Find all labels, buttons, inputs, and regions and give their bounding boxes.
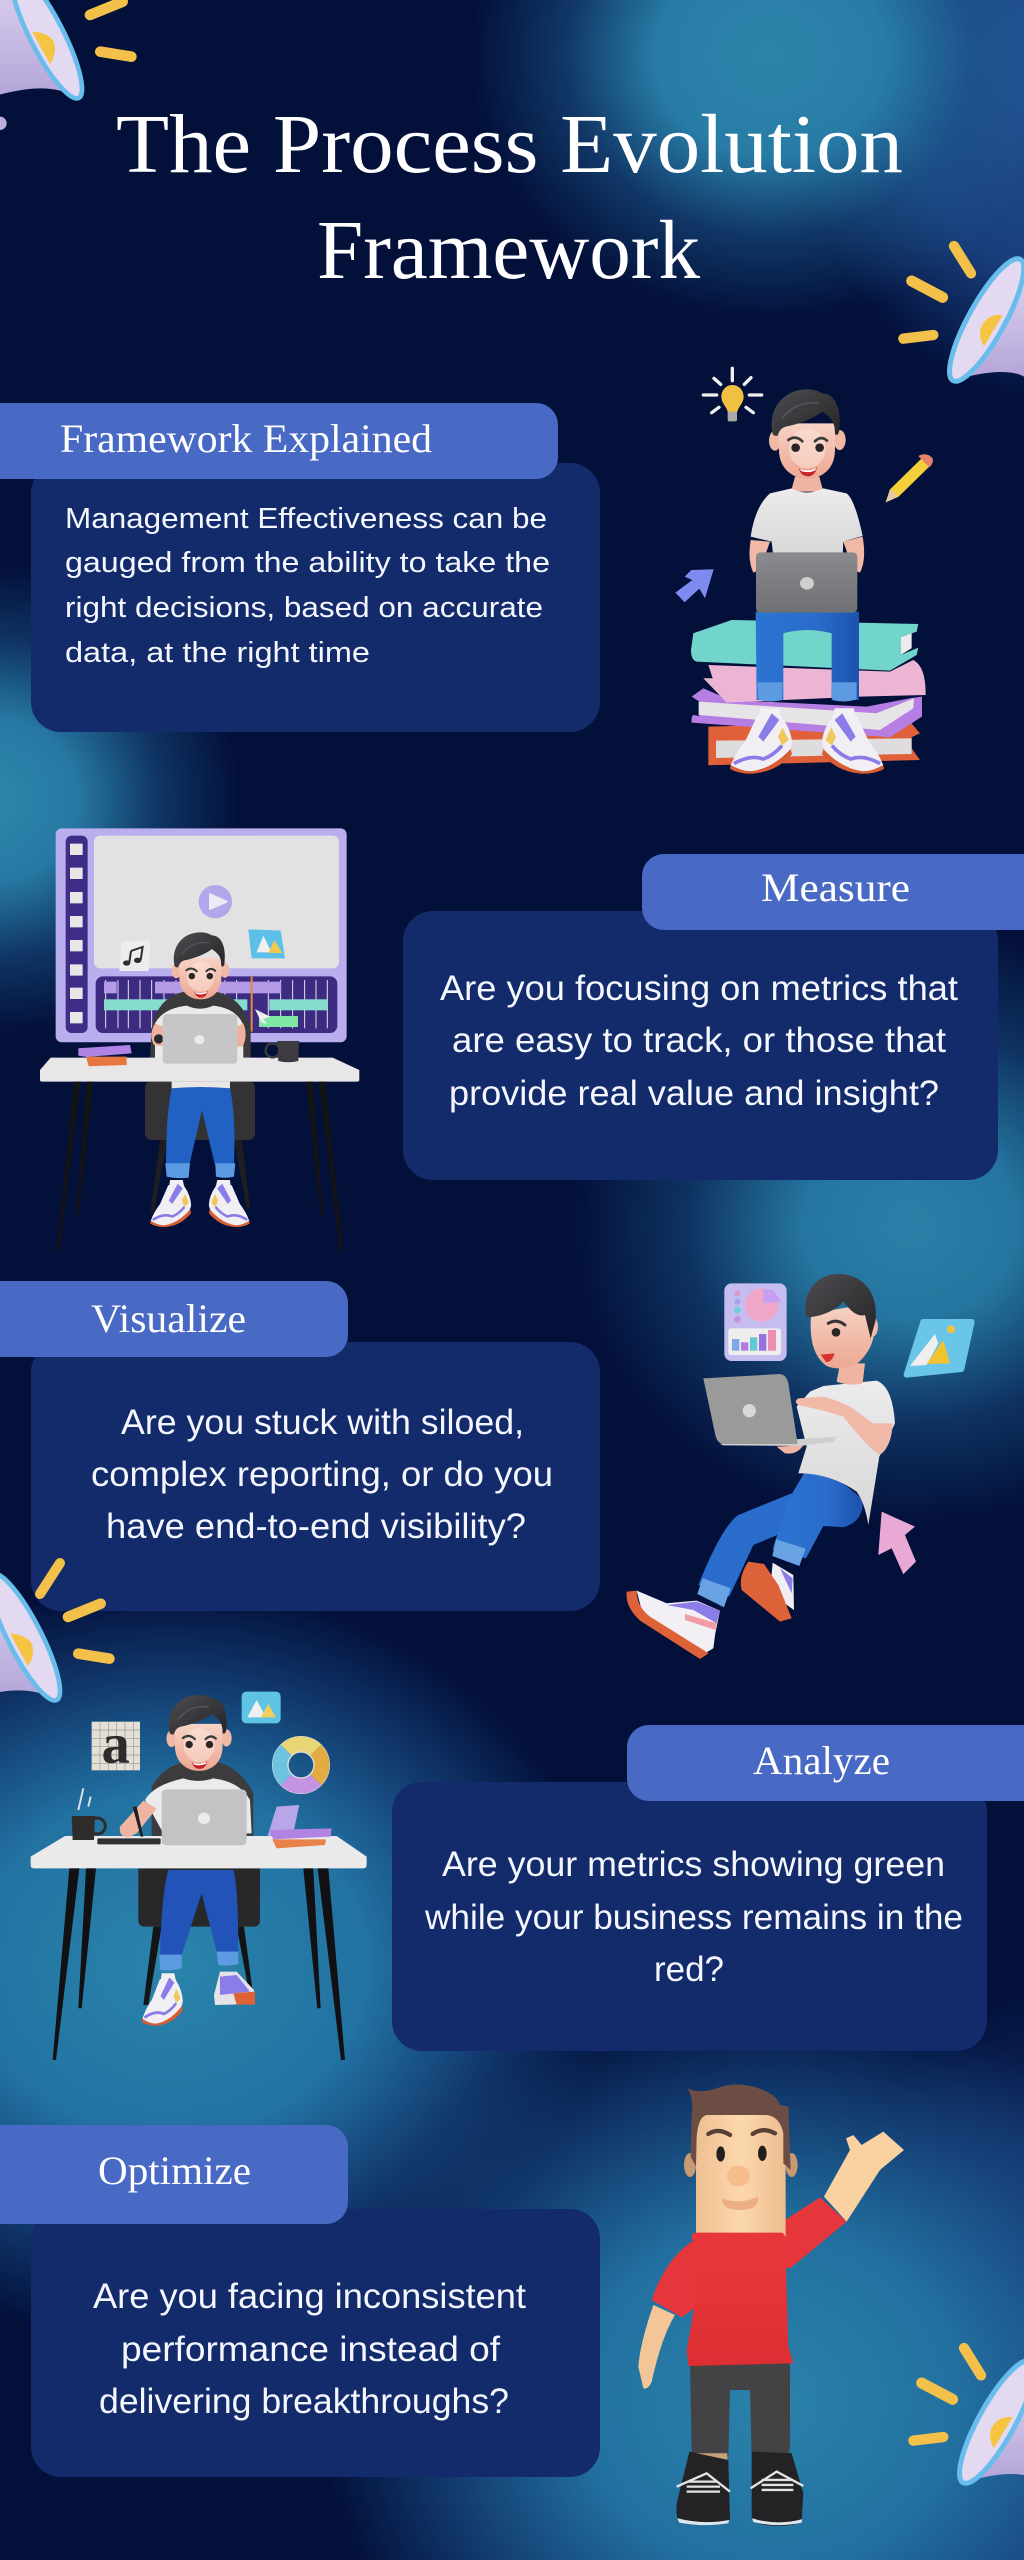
jeans: [159, 1870, 238, 1971]
neck: [837, 1363, 865, 1385]
body text: [93, 2277, 526, 2421]
heading: Analyze: [753, 1738, 890, 1783]
heading tab: [0, 2125, 348, 2224]
shoes: [676, 2452, 803, 2526]
shirt: [797, 1381, 895, 1525]
desk: [31, 1836, 367, 2060]
icon: image card: [242, 1692, 281, 1723]
shirt: [652, 2233, 793, 2366]
body text: performance instead of: [121, 2330, 500, 2369]
body text: provide real value and insight?: [449, 1074, 939, 1113]
panel: optimize: [0, 2125, 600, 2477]
shoe: right foot: [741, 1562, 794, 1622]
body text: Management Effectiveness can be: [65, 503, 547, 535]
icon: pink cursor: [878, 1512, 916, 1574]
laptop: [703, 1374, 837, 1454]
icon: music note: [119, 940, 151, 971]
pants: [690, 2363, 790, 2468]
icon: image card: [248, 929, 285, 958]
heading tab: [0, 1281, 348, 1357]
tablet: [97, 1838, 161, 1844]
body text: [424, 1845, 963, 1989]
video editor board: [56, 828, 347, 1042]
icon: pencil: [886, 454, 933, 502]
icon: letter card: [92, 1713, 140, 1775]
shirt: [145, 1778, 252, 1833]
icon: letter card: a: [101, 1713, 130, 1775]
heading: Optimize: [98, 2148, 251, 2193]
chair: [145, 990, 255, 1212]
shirt and arms: [749, 477, 864, 573]
arm and pen: [120, 1801, 157, 1837]
heading: Visualize: [91, 1296, 246, 1341]
illustration: boy at design desk: [31, 1692, 367, 2060]
heading tab: [642, 854, 1024, 930]
desk: [40, 1058, 359, 1252]
body text: gauged from the ability to take the: [65, 547, 550, 579]
megaphone: middle left: [0, 1562, 109, 1732]
megaphone: bottom right: [913, 2348, 1024, 2491]
heading tab: [627, 1725, 1024, 1801]
raised arm: [780, 2132, 904, 2268]
head: [166, 1695, 232, 1771]
body text: red?: [654, 1950, 724, 1989]
shoes: [142, 1972, 255, 2026]
timeline: [96, 976, 337, 1033]
icon: image card: [907, 1322, 972, 1375]
illustration: floating boy with laptop: [626, 1274, 972, 1659]
heading tab: [0, 403, 558, 479]
panel: framework explained: [0, 403, 600, 732]
title: [116, 98, 903, 297]
body text: [65, 503, 550, 669]
arms: [151, 1023, 246, 1047]
illustration: waving man in red shirt: [638, 2085, 904, 2526]
shoes: [150, 1180, 250, 1227]
lowered arm: [638, 2305, 675, 2389]
icon: donut chart: [273, 1737, 329, 1793]
laptop: [162, 1789, 247, 1845]
body text: [91, 1403, 553, 1546]
panel background: [403, 911, 998, 1180]
icon: light bulb: [703, 368, 762, 421]
head: [688, 2085, 791, 2237]
body text: while your business remains in the: [424, 1898, 963, 1937]
jeans: [756, 612, 859, 701]
heading: Framework Explained: [60, 416, 432, 461]
chair: [138, 1760, 260, 2005]
panel: analyze: [392, 1725, 1024, 2051]
megaphone: top right: [903, 246, 1024, 389]
shoes: [730, 708, 884, 774]
books: [78, 1045, 132, 1066]
panel background: [31, 2209, 600, 2477]
panel background: [392, 1782, 987, 2051]
heading: Measure: [761, 865, 910, 910]
phone and books: [267, 1805, 332, 1848]
megaphone: top left: [0, 0, 131, 130]
body text: data, at the right time: [65, 637, 370, 669]
mug: [266, 1041, 299, 1062]
body text: have end-to-end visibility?: [106, 1507, 526, 1546]
laptop: [756, 552, 857, 613]
books: [691, 620, 926, 765]
shirt: [155, 1006, 243, 1062]
shoe: left foot: [626, 1591, 720, 1659]
panel: measure: [403, 854, 1024, 1180]
jeans: [165, 1082, 235, 1178]
head: [172, 932, 229, 999]
arm: [796, 1397, 893, 1455]
body text: Are you stuck with siloed,: [121, 1403, 524, 1442]
body text: are easy to track, or those that: [452, 1021, 946, 1060]
body text: complex reporting, or do you: [91, 1455, 553, 1494]
body text: Are you focusing on metrics that: [440, 969, 958, 1008]
body text: Are you facing inconsistent: [93, 2277, 526, 2316]
body text: delivering breakthroughs?: [99, 2382, 509, 2421]
title: The Process Evolution: [116, 98, 903, 191]
icon: arrow: [675, 569, 714, 602]
body text: [440, 969, 958, 1113]
panel: visualize: [0, 1281, 600, 1611]
panel background: [31, 463, 600, 732]
jeans: [697, 1471, 863, 1607]
ears: [684, 2153, 798, 2177]
head: [769, 389, 846, 479]
icon: play: [199, 885, 232, 918]
film strip: [66, 836, 88, 1033]
head: [806, 1274, 878, 1368]
body text: right decisions, based on accurate: [65, 592, 543, 624]
panel background: [31, 1342, 600, 1611]
laptop: [163, 1014, 237, 1064]
illustration: boy at video editing desk: [40, 828, 359, 1252]
body text: Are your metrics showing green: [442, 1845, 945, 1884]
icon: dashboard card: [724, 1283, 787, 1361]
title: Framework: [317, 204, 700, 297]
mug: [72, 1788, 105, 1840]
illustration: boy on books with laptop: [675, 368, 933, 774]
